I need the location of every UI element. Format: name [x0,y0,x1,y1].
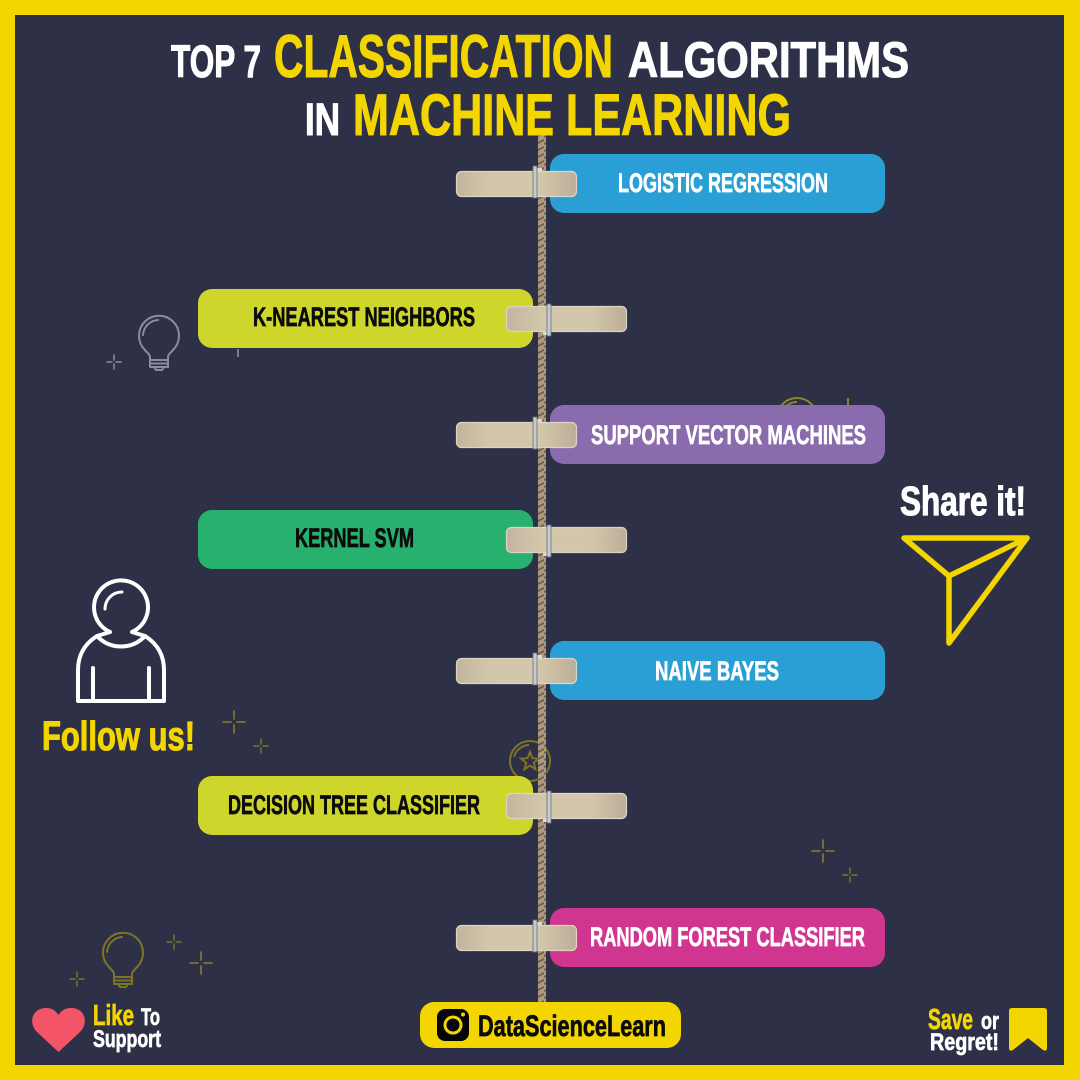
card: support vector machines [456,405,885,464]
title [171,23,909,148]
title line 1 [171,23,909,90]
save or regret text: or [981,1008,999,1035]
save or regret text: Save [928,1004,973,1036]
icon: paper plane [904,538,1027,643]
instagram handle pill [420,1002,681,1048]
like to support text: Like [93,1000,134,1032]
rope [538,135,546,1002]
decorative icon: olive bulb and sparkles [70,933,212,987]
title line 2 [305,83,791,148]
title line 1: CLASSIFICATION [274,23,613,90]
save or regret block [928,1004,1047,1056]
save or regret text: Regret! [930,1029,999,1056]
title line 1: TOP 7 [171,36,261,87]
like to support text: To [141,1004,160,1031]
card: random forest classifier: RANDOM FOREST CLASSIFIER [590,922,865,952]
icon: person [78,580,164,701]
like to support block [32,1000,161,1053]
decorative icon: grey bulb and sparkle [107,316,238,370]
card: decision tree classifier: DECISION TREE CLASSIFIER [228,790,480,820]
like to support text: Support [93,1026,161,1053]
icon: instagram [437,1009,469,1041]
card: k-nearest neighbors: K-NEAREST NEIGHBORS [253,302,475,332]
card: kernel svm: KERNEL SVM [295,523,414,553]
card: naive bayes: NAIVE BAYES [655,656,779,686]
card: logistic regression [456,154,885,213]
card: naive bayes [456,641,885,700]
decorative icon: badge behind purple card [777,398,848,438]
icon: bookmark [1009,1008,1047,1051]
title line 1: ALGORITHMS [628,32,909,88]
decorative icon: star badge [510,741,550,781]
save or regret text [928,1004,999,1056]
title line 2: MACHINE LEARNING [353,83,791,148]
follow us block [42,580,195,759]
share it label: Share it! [900,478,1026,524]
decorative sparkles [223,711,857,882]
card: logistic regression: LOGISTIC REGRESSION [618,168,828,198]
handle text: DataScienceLearn [478,1010,666,1043]
icon: heart [32,1008,85,1052]
follow us label: Follow us! [42,713,195,759]
card: decision tree classifier [198,776,626,835]
like to support text [93,1000,161,1053]
share it block [900,478,1027,643]
card: kernel svm [198,510,626,569]
card: k-nearest neighbors [198,289,626,348]
title line 2: IN [305,94,340,145]
card: support vector machines: SUPPORT VECTOR MACHINES [591,420,866,450]
card: random forest classifier [456,908,885,967]
